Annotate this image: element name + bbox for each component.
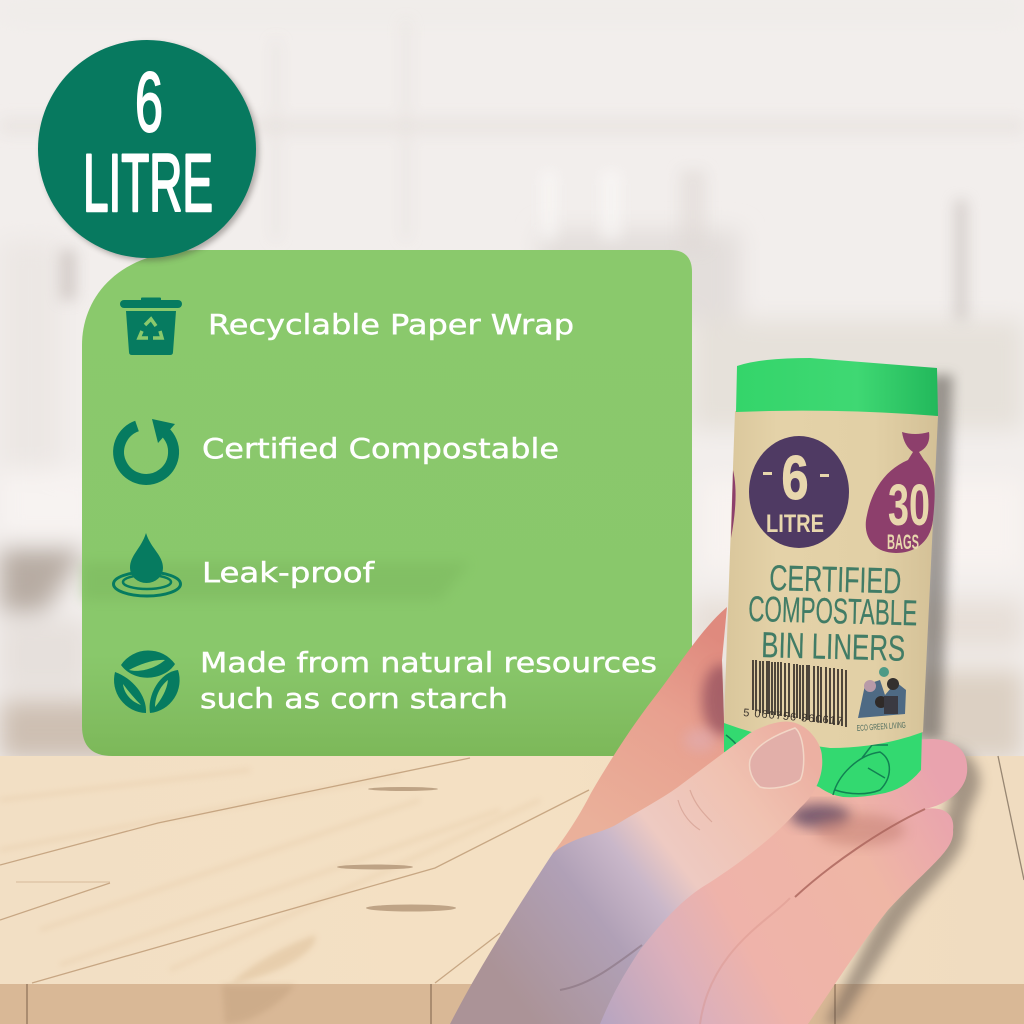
panel: features [82, 250, 692, 756]
barcode [743, 660, 846, 728]
label: product name [748, 557, 918, 669]
thumbnail [749, 728, 804, 788]
hand: index finger and palm [553, 607, 967, 1024]
logo: eco green living [856, 667, 906, 733]
logo: eco green living: ECO GREEN LIVING [856, 720, 906, 733]
hand shadow [825, 745, 980, 1024]
label: product name: CERTIFIED [769, 557, 902, 601]
feature: leak-proof [114, 533, 376, 596]
icon: three leaves [114, 650, 180, 713]
badge: 6 litre: 6 [135, 55, 163, 149]
icon: recycling bin [120, 298, 182, 355]
icon: circular arrow [119, 419, 175, 479]
green roll top [736, 358, 938, 416]
feature: natural resources [114, 647, 657, 715]
label: 30 bags: BAGS [887, 531, 919, 554]
text: Leak-proof [202, 557, 376, 589]
label: product name: BIN LINERS [761, 624, 906, 669]
label: 6 litre: 6 [782, 444, 808, 513]
icon: water drop [114, 533, 180, 596]
blurred kitchen background [0, 0, 1024, 760]
barcode: 5 060756 360617 [743, 707, 843, 728]
text: Made from natural resources [200, 647, 657, 679]
label: 6 litre: LITRE [766, 510, 824, 538]
product: roll of bin liners [724, 358, 938, 797]
feature: certified compostable [119, 419, 559, 479]
badge: 6 litre [38, 40, 259, 261]
label: product name: COMPOSTABLE [748, 588, 918, 633]
feature: natural resources: such as corn starch [200, 683, 508, 715]
cardboard sleeve [724, 409, 938, 748]
hand: thumb and wrist [450, 722, 822, 1024]
left edge of rear label [731, 470, 736, 538]
label: 30 bags: 30 [888, 473, 930, 538]
text: Certified Compostable [202, 433, 559, 465]
knuckle creases [560, 790, 712, 990]
product shadow [915, 375, 953, 740]
wooden table [0, 756, 1024, 1024]
badge: 6 litre: LITRE [83, 138, 213, 229]
label: 30 bags [866, 432, 935, 554]
label: 6 litre [749, 436, 849, 548]
feature: recyclable paper wrap [120, 298, 574, 355]
panel shading [82, 562, 470, 600]
text: Recyclable Paper Wrap [208, 309, 574, 341]
bag roll bottom [724, 722, 922, 797]
